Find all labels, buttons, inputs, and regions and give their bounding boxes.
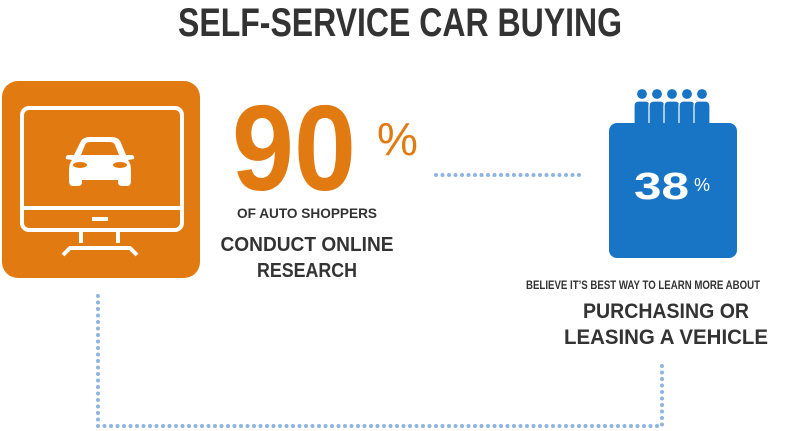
text block: of auto shoppers: OF AUTO SHOPPERS: [237, 205, 377, 221]
title: SELF-SERVICE CAR BUYING: [178, 1, 622, 45]
icon: monitor: [22, 108, 182, 255]
stat: 90%: %: [377, 113, 418, 165]
connector dotted lines: [98, 175, 662, 426]
panel: orange monitor icon: [2, 81, 200, 278]
text block: of auto shoppers: CONDUCT ONLINE: [220, 234, 394, 256]
text block: believe: LEASING A VEHICLE: [564, 326, 768, 349]
text block: of auto shoppers: [220, 205, 394, 282]
panel: blue people card: [609, 88, 737, 258]
panel: blue people card: %: [694, 175, 710, 195]
stat: 38%: 38: [634, 166, 689, 208]
stat: 90%: 90: [232, 80, 356, 216]
icon: people: [634, 88, 710, 126]
text block: believe: [526, 280, 768, 349]
icon: car: [66, 137, 134, 186]
text block: of auto shoppers: RESEARCH: [257, 260, 357, 282]
text block: believe: BELIEVE IT’S BEST WAY TO LEARN MORE ABOUT: [526, 280, 760, 292]
text block: believe: PURCHASING OR: [583, 300, 749, 323]
